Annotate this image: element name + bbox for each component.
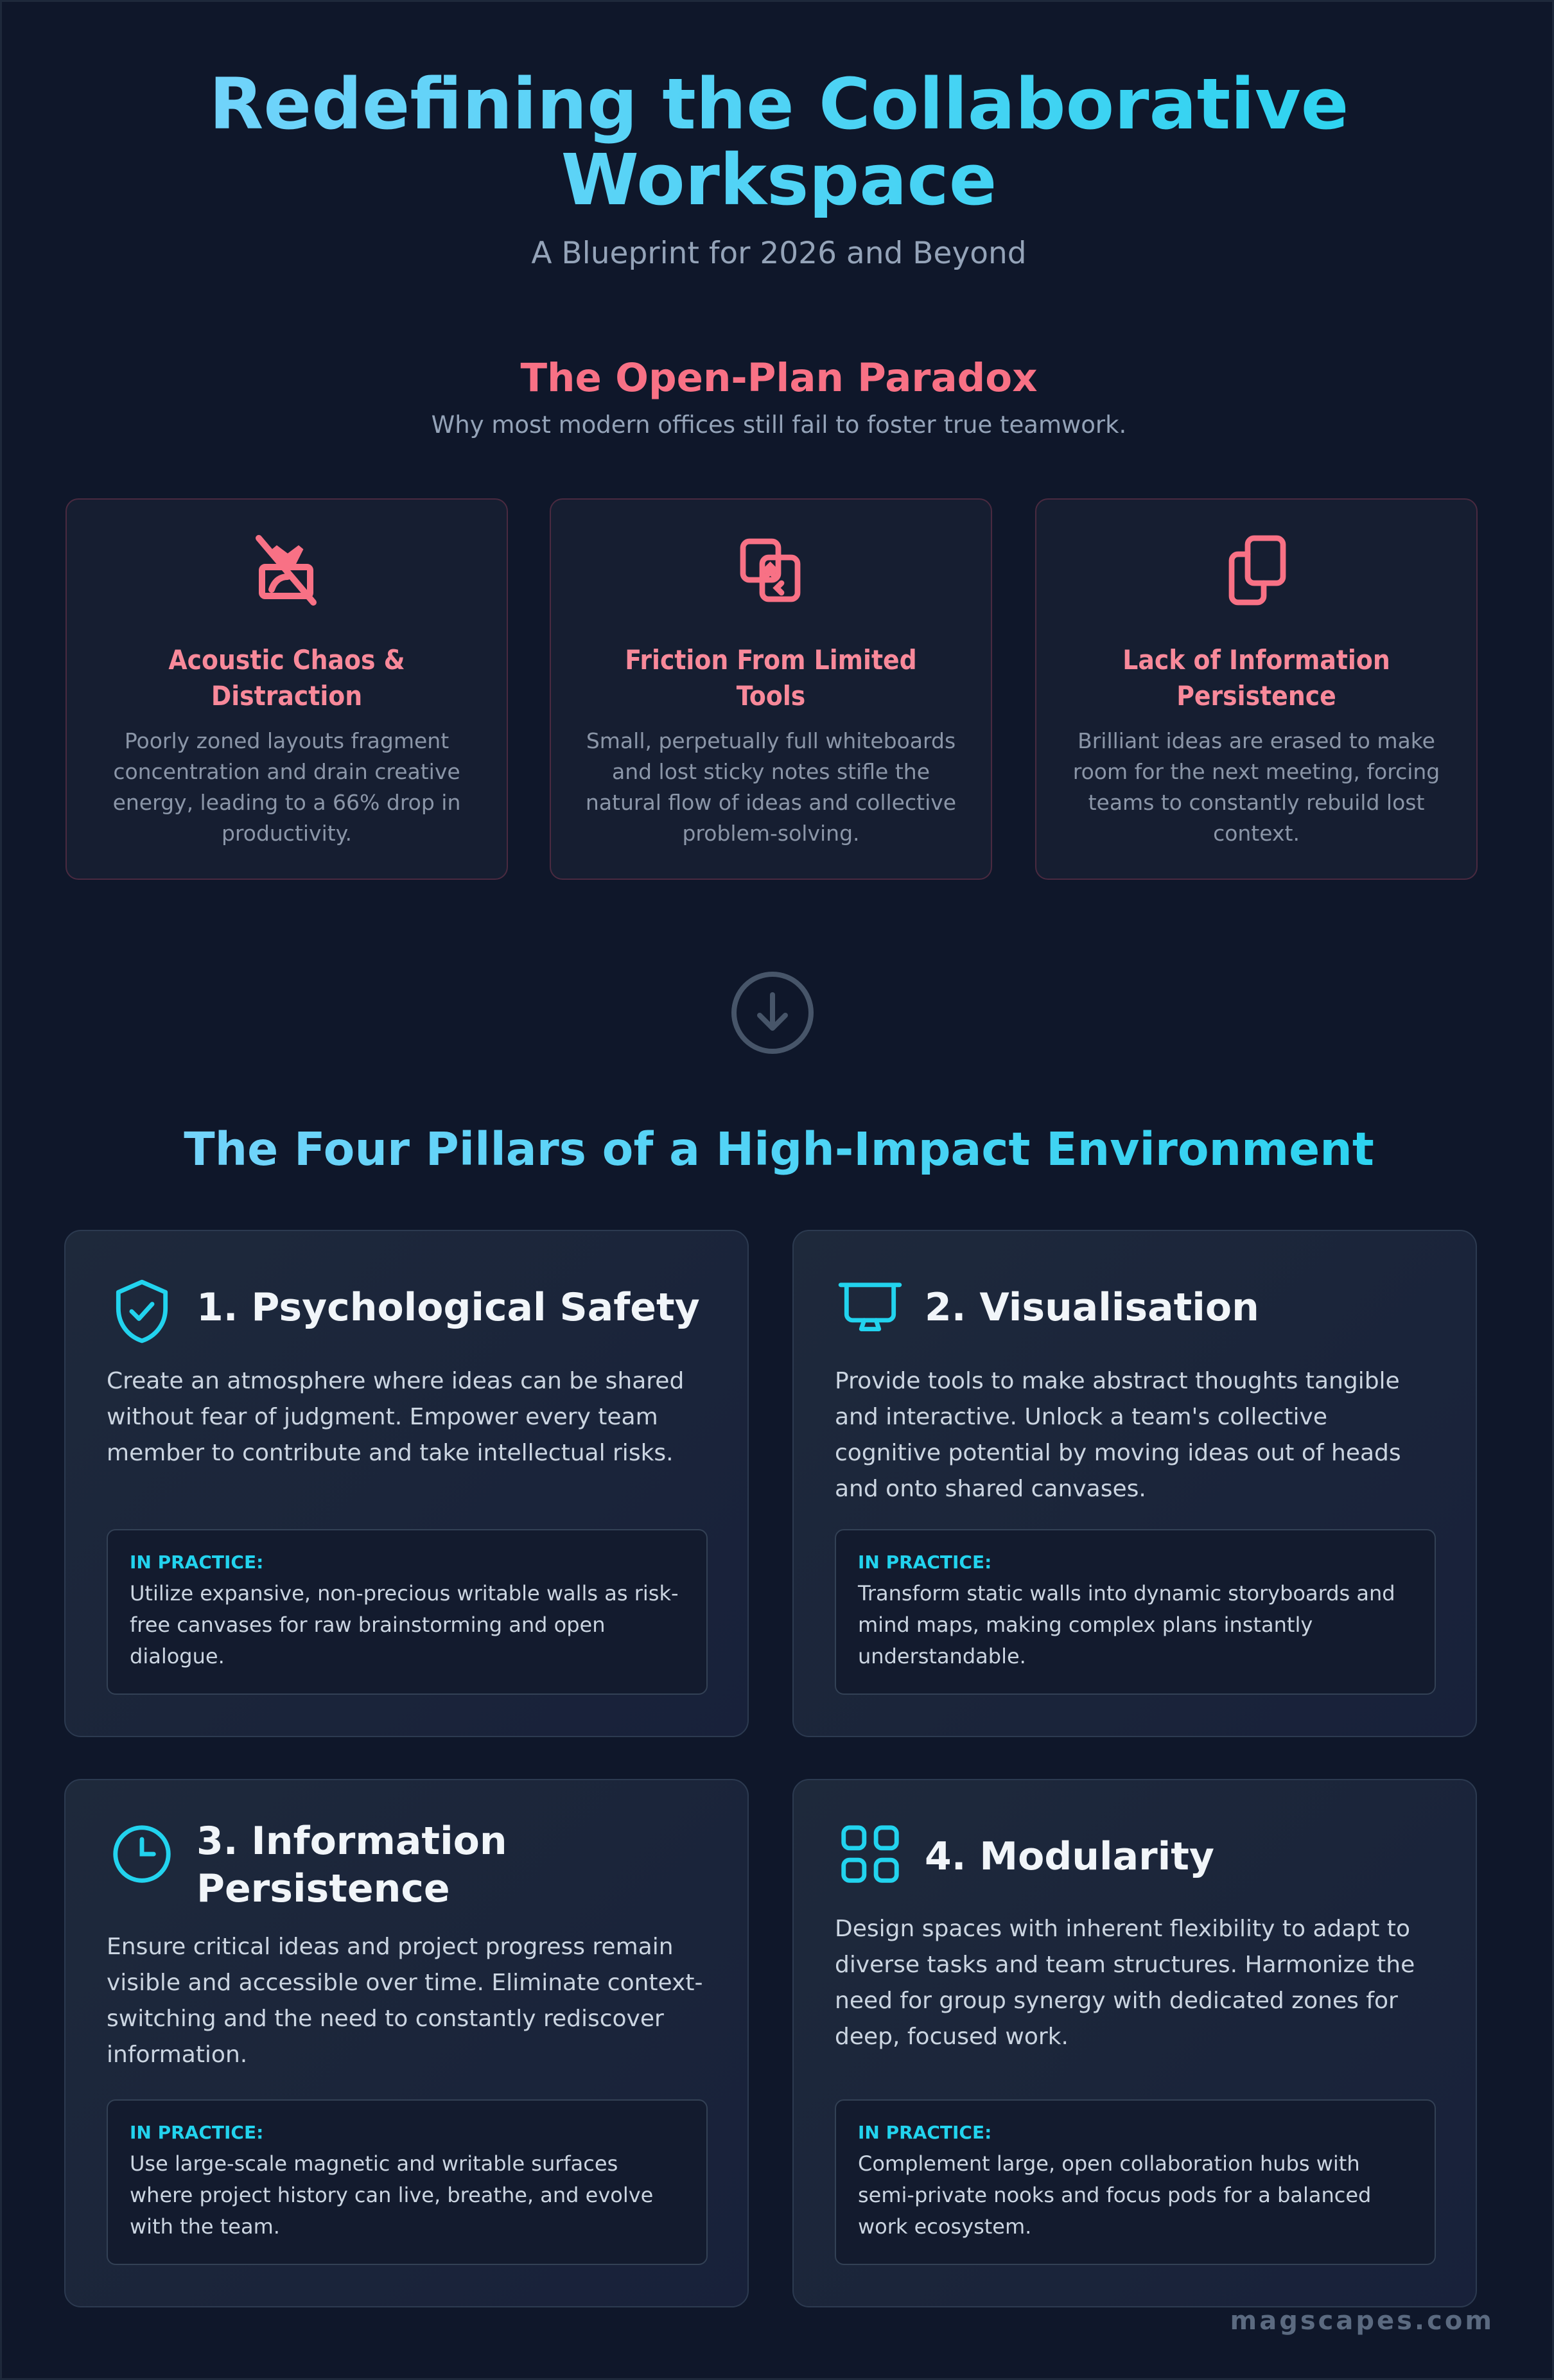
in practice box: Complement large, open collaboration hubs with semi-private nooks and focus pods for a balanced work ecosystem. <box>858 2151 1371 2239</box>
panel: visualisation <box>792 1230 1477 1737</box>
footer: brand: magscapes.com <box>1230 2306 1494 2336</box>
pillar title: Persistence <box>196 1866 450 1911</box>
in practice box: IN PRACTICE: <box>858 2122 991 2143</box>
icon: presentation screen <box>839 1282 902 1331</box>
pillar title <box>196 1819 507 1911</box>
title: Workspace <box>561 139 997 221</box>
in practice box: Transform static walls into dynamic storyboards and mind maps, making complex plans instantly understandable. <box>858 1581 1395 1668</box>
card title <box>1122 644 1390 712</box>
arrow: down circle <box>731 972 814 1054</box>
icon: copy <box>1229 536 1286 605</box>
pillar title: 4. Modularity <box>925 1834 1214 1879</box>
in practice box: IN PRACTICE: <box>858 1552 991 1573</box>
card title: Distraction <box>211 680 362 712</box>
title: Redefining the Collaborative <box>209 63 1349 145</box>
pillar body: Design spaces with inherent flexibility to adapt to diverse tasks and team structures. Harmonize the need for group synergy with dedicated zones for deep, focused work. <box>835 1916 1415 2050</box>
card title: Tools <box>737 680 805 712</box>
icon: grid <box>841 1825 899 1883</box>
card title: Friction From Limited <box>625 644 917 676</box>
card title: Lack of Information <box>1122 644 1390 676</box>
card text: Small, perpetually full whiteboards and lost sticky notes stifle the natural flow of ideas and collective problem-solving. <box>586 728 956 846</box>
section heading: open-plan paradox: The Open-Plan Paradox <box>520 355 1038 401</box>
icon: clock <box>113 1825 171 1883</box>
in practice box <box>107 1529 708 1695</box>
icon: shield check <box>116 1279 168 1343</box>
card title: Acoustic Chaos & <box>168 644 405 676</box>
in practice box: Utilize expansive, non-precious writable walls as risk-free canvases for raw brainstorming and open dialogue. <box>130 1581 679 1668</box>
pillar body: Ensure critical ideas and project progress remain visible and accessible over time. Eliminate context-switching and the need to constantly rediscover information. <box>107 1934 703 2068</box>
card text: Brilliant ideas are erased to make room for the next meeting, forcing teams to constantly rebuild lost context. <box>1073 728 1440 846</box>
panel: information persistence <box>1035 498 1478 880</box>
pillar body: Create an atmosphere where ideas can be shared without fear of judgment. Empower every team member to contribute and take intellectual risks. <box>107 1368 684 1466</box>
card title <box>625 644 917 712</box>
panel: psychological safety <box>64 1230 749 1737</box>
icon: overlapping boards <box>740 538 800 602</box>
panel: acoustic chaos <box>65 498 508 880</box>
pillar title: 1. Psychological Safety <box>196 1285 700 1330</box>
in practice box <box>835 1529 1436 1695</box>
pillar body: Provide tools to make abstract thoughts tangible and interactive. Unlock a team's collective cognitive potential by moving ideas out of heads and onto shared canvases. <box>835 1368 1401 1502</box>
pillar title: 3. Information <box>196 1819 507 1864</box>
card text: Poorly zoned layouts fragment concentration and drain creative energy, leading to a 66% drop in productivity. <box>113 728 460 846</box>
section subheading: Why most modern offices still fail to foster true teamwork. <box>432 411 1126 439</box>
subtitle: A Blueprint for 2026 and Beyond <box>531 236 1027 271</box>
in practice box <box>835 2099 1436 2265</box>
panel: friction <box>550 498 992 880</box>
section heading: four pillars: The Four Pillars of a High-Impact Environment <box>184 1123 1374 1176</box>
title <box>2 66 1554 218</box>
in practice box: IN PRACTICE: <box>130 2122 263 2143</box>
card title: Persistence <box>1176 680 1336 712</box>
icon: muted speaker <box>256 535 317 606</box>
card title <box>168 644 405 712</box>
in practice box: Use large-scale magnetic and writable surfaces where project history can live, breathe, and evolve with the team. <box>130 2151 653 2239</box>
pillar title: 2. Visualisation <box>925 1285 1259 1330</box>
panel: information persistence pillar <box>64 1779 749 2307</box>
in practice box <box>107 2099 708 2265</box>
panel: modularity <box>792 1779 1477 2307</box>
in practice box: IN PRACTICE: <box>130 1552 263 1573</box>
